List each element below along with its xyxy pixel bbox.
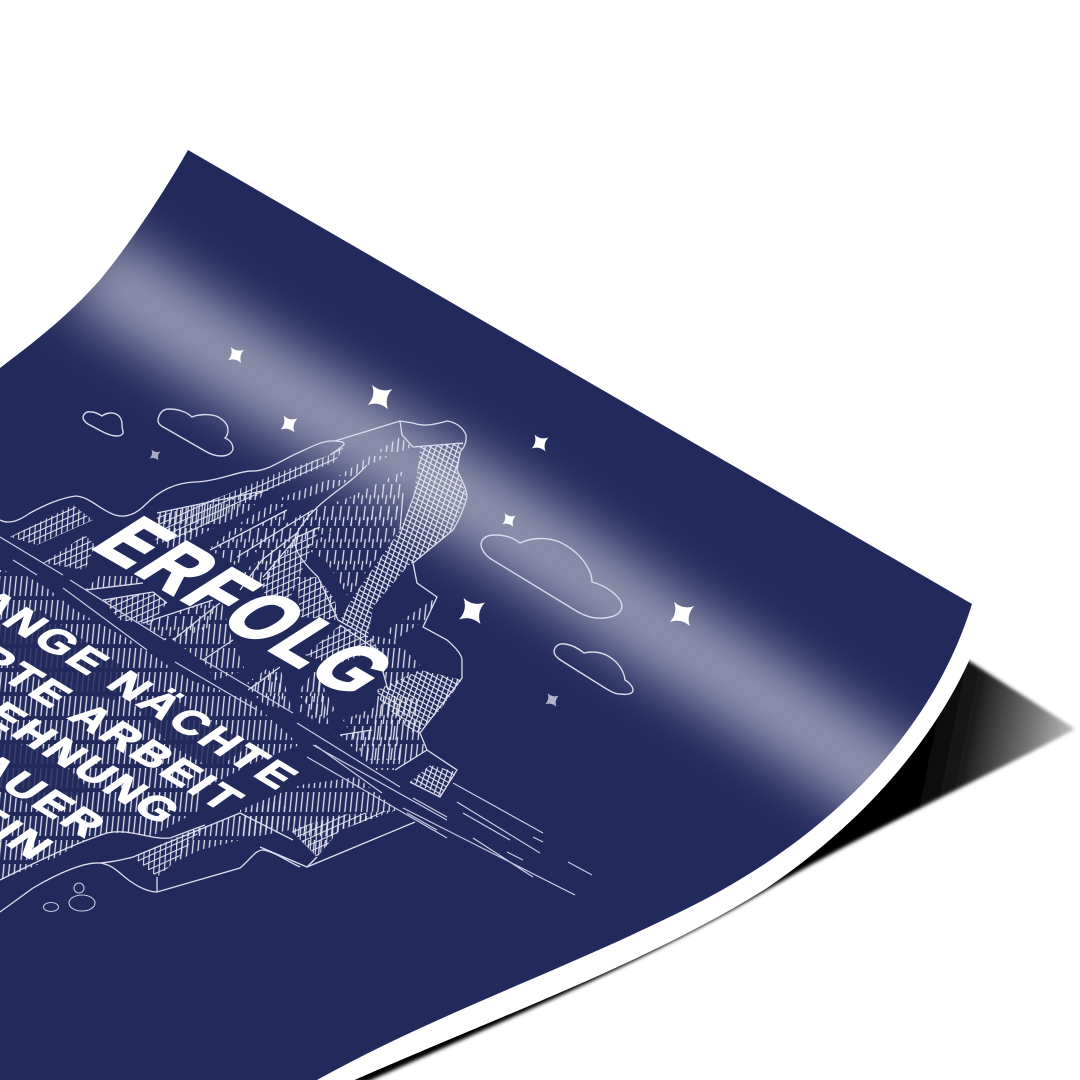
- star large: [670, 602, 694, 626]
- bubbles: [44, 883, 95, 912]
- star: [532, 434, 548, 452]
- cloud right lower: [554, 644, 633, 694]
- star faint: [150, 450, 160, 460]
- clouds: [83, 409, 633, 694]
- glossy highlight band: [85, 262, 940, 820]
- cloud right large: [481, 535, 622, 618]
- white paper margin of the curl: [300, 600, 990, 1080]
- star: [502, 513, 516, 527]
- star: [228, 347, 244, 363]
- cloud left: [158, 409, 233, 456]
- hatching above waterline: [10, 437, 467, 797]
- subtitle lines: [0, 593, 300, 860]
- star: [280, 416, 298, 432]
- cloud small left: [83, 412, 123, 436]
- cast shadow under the curled poster corner: [340, 655, 1075, 1080]
- hatching below waterline: [0, 570, 397, 880]
- title ERFOLG: ERFOLG: [74, 505, 415, 707]
- unhatched gaps in the lower block: [0, 610, 250, 810]
- stars: [146, 342, 702, 711]
- star faint: [545, 693, 559, 707]
- iceberg: [0, 421, 592, 912]
- waterline dashes: [0, 537, 592, 895]
- iceberg outlines: [0, 421, 467, 912]
- star large: [459, 598, 485, 624]
- star large: [368, 385, 392, 409]
